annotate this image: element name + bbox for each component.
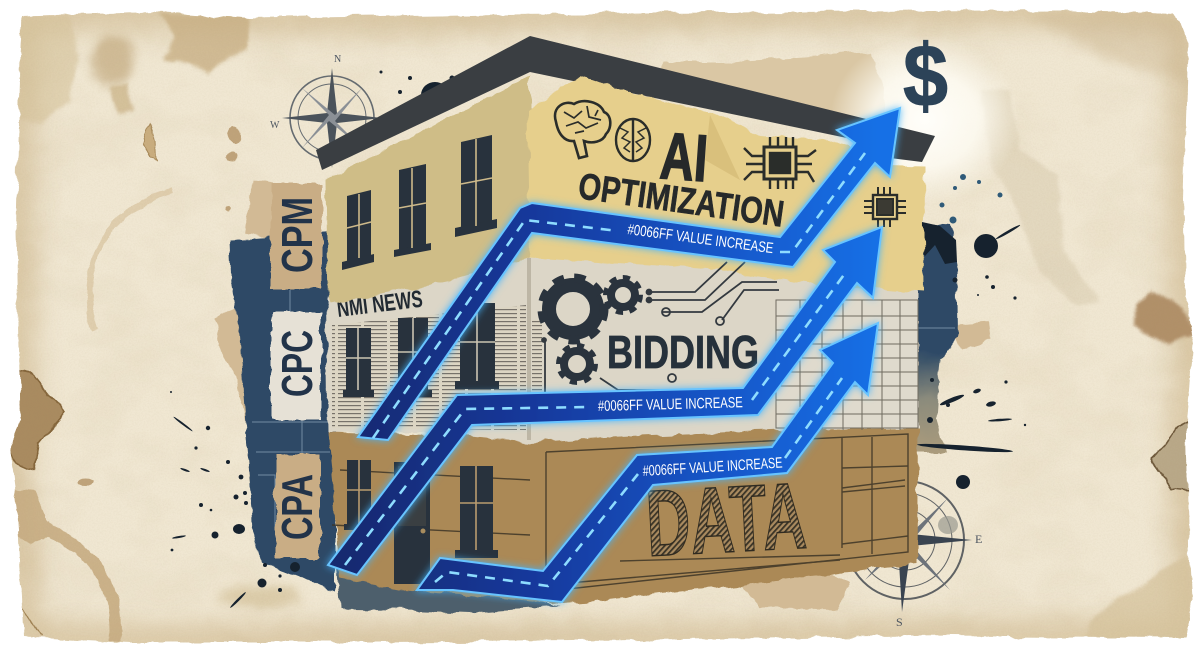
panel: tan torn scraps <box>215 180 992 610</box>
heading: DATA: DATA <box>644 463 809 576</box>
label: pale stain right edge <box>1152 420 1190 492</box>
label: compass letters: W <box>270 120 280 131</box>
label: corner stain top right <box>1040 12 1185 78</box>
label: value increase on AI arrow: #0066FF VALUE INCREASE <box>626 221 774 257</box>
label: smudge bottom <box>218 586 302 608</box>
label: compass letters <box>270 54 341 131</box>
panel: metric tab CPC: CPC <box>273 330 322 397</box>
icon: compass bottom right <box>840 470 982 629</box>
label: drip stain <box>143 124 157 162</box>
label: compass letters <box>896 532 982 629</box>
panel: torn tan stain behind the roof <box>660 52 884 130</box>
icon: light glow behind the dollar sign <box>830 35 1020 205</box>
panel: building roof <box>316 36 935 170</box>
panel: dark blue blueprint paper behind the building <box>230 222 958 612</box>
label: newspaper masthead: NMI NEWS <box>335 286 424 323</box>
arrow: data value increase <box>417 323 878 602</box>
arrow: AI optimization value increase <box>358 108 900 440</box>
panel: data tier, brown paper <box>328 422 918 604</box>
label: stain right edge <box>1135 293 1195 345</box>
icon: dollar sign: $ <box>903 26 948 125</box>
arrow: bidding value increase <box>328 227 882 575</box>
label: smudge top left <box>91 34 135 86</box>
label: value increase on data arrow: #0066FF VALUE INCREASE <box>642 454 783 480</box>
label: water stains right <box>980 88 1100 305</box>
label: stain top left <box>157 14 250 75</box>
label: compass letters: E <box>975 532 982 546</box>
label: compass letters: S <box>896 615 903 629</box>
heading: BIDDING: BIDDING <box>607 326 759 378</box>
icon: windows upper tier <box>342 135 497 270</box>
icon: compass top left <box>270 54 382 168</box>
icon: gears <box>542 278 640 382</box>
icon: circuit traces <box>542 262 779 400</box>
label: ring stain bottom left <box>14 490 115 640</box>
label: stain bottom right <box>1085 555 1192 640</box>
icon: brain top view <box>616 119 650 161</box>
heading: AI: AI <box>658 118 710 195</box>
label: stain left edge <box>6 368 64 470</box>
panel: bidding tier, newspaper paper <box>326 255 918 442</box>
panel: AI optimization tier, yellow paper <box>326 76 924 304</box>
icon: brain side view <box>555 101 610 158</box>
icon: ink splatters <box>170 70 1026 609</box>
icon: small processor chip <box>864 187 906 227</box>
label: form table <box>776 300 918 430</box>
label: stain corner top left <box>18 16 78 122</box>
panel: metric tab CPA: CPA <box>273 474 322 540</box>
panel: metric tab CPM: CPM <box>273 197 322 273</box>
label: value increase on bidding arrow: #0066FF VALUE INCREASE <box>598 394 743 415</box>
icon: processor chip <box>744 137 816 189</box>
icon: windows middle tier <box>343 303 499 397</box>
label: blueprint lines on data tier <box>332 434 908 590</box>
icon: windows and door lower tier <box>344 460 498 584</box>
label: drips near compass <box>78 128 242 486</box>
label: coffee ring left <box>88 190 173 330</box>
label: compass letters: N <box>334 54 341 65</box>
heading: OPTIMIZATION: OPTIMIZATION <box>576 165 787 235</box>
label: faint grid on blue paper <box>252 290 955 530</box>
